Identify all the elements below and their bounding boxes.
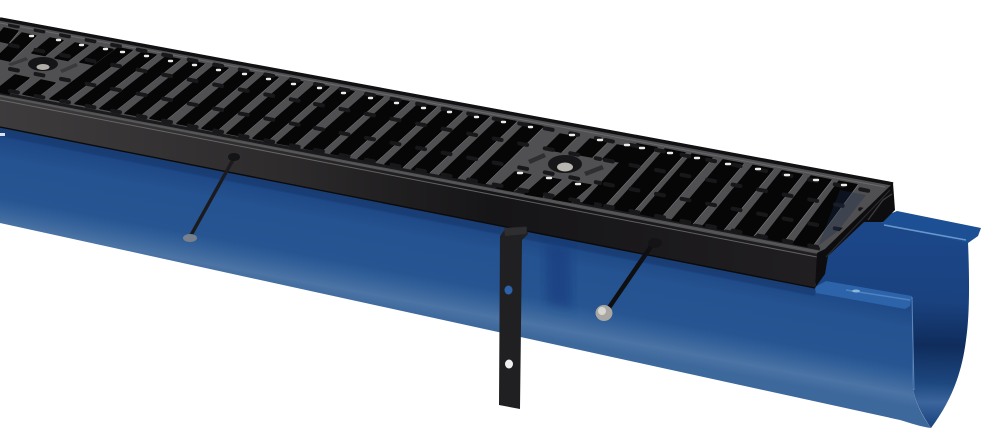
grate top surface (0, 18, 893, 254)
anchor nail left (183, 153, 240, 242)
grate cross-rib ticks (10, 25, 890, 261)
grate outer rim (0, 19, 893, 252)
near rim lip (815, 281, 914, 390)
grate end of frame (815, 183, 895, 288)
grate slots (0, 28, 857, 247)
grate frame front face (0, 96, 818, 288)
shadow under frame on wall (0, 127, 815, 296)
left edge highlight (0, 133, 5, 136)
anchor strap (499, 226, 528, 409)
centre bolt (528, 153, 604, 176)
slot end highlights (30, 36, 846, 185)
strap shadow on wall (545, 243, 572, 308)
anchor nail right (596, 238, 662, 321)
channel outer near wall (0, 125, 931, 428)
channel interior far wall (815, 218, 969, 428)
channel far rim flange (880, 211, 981, 243)
left bolt (8, 57, 78, 73)
bar edge highlights (0, 28, 858, 247)
